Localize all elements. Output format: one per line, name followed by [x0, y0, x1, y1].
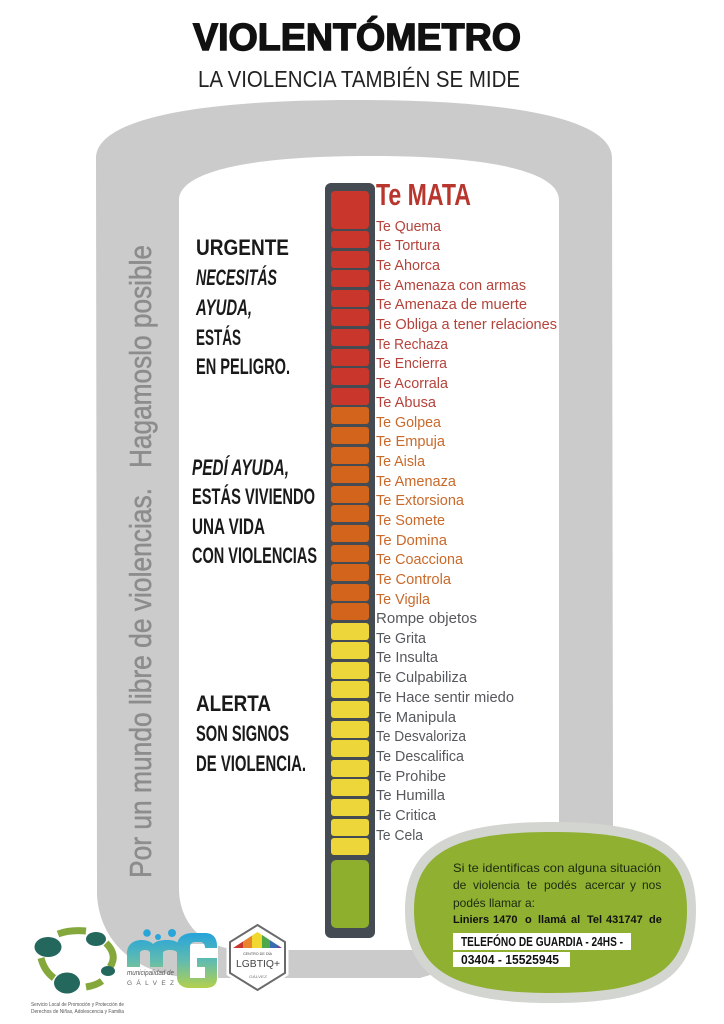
ask for help message: PEDÍ AYUDA, [192, 455, 289, 480]
callout text: nos [642, 878, 661, 892]
orange labels: Te Domina [376, 532, 448, 549]
grey labels: Te Humilla [376, 787, 446, 804]
callout text: podés [544, 878, 577, 892]
callout text: 431747 [606, 914, 643, 926]
subtitle: LA VIOLENCIA TAMBIÉN SE MIDE [198, 66, 520, 92]
orange segments [331, 407, 369, 620]
logo: municipalidad de galvez: municipalidad de [127, 970, 174, 977]
red labels: Te Ahorca [376, 257, 441, 274]
grey labels: Te Hace sentir miedo [376, 689, 514, 706]
side slogan: Por un mundo libre de violencias. [123, 488, 158, 878]
guard phone box: TELEFÓNO DE GUARDIA - 24HS - [461, 934, 623, 949]
side slogan: Hagamoslo posible [123, 245, 158, 468]
logo: LGBTIQ+ [230, 925, 285, 990]
callout text [453, 861, 662, 926]
grey labels: Te Grita [376, 630, 427, 647]
title: VIOLENTÓMETRO [193, 15, 521, 59]
logo: municipalidad de galvez [127, 929, 218, 988]
red labels: Te Obliga a tener relaciones [376, 316, 557, 333]
urgent message: URGENTE [196, 235, 289, 260]
orange labels [376, 414, 465, 608]
logo: LGBTIQ+: GÁLVEZ [249, 974, 268, 979]
urgent message: ESTÁS [196, 325, 241, 350]
callout text: al [571, 914, 580, 926]
red labels: Te Encierra [376, 355, 448, 372]
callout text: llamá [538, 914, 567, 926]
ask for help message [192, 455, 317, 568]
contact callout [405, 822, 696, 1003]
yellow segments [331, 623, 369, 855]
orange labels: Te Extorsiona [376, 492, 465, 509]
logo: LGBTIQ+: LGBTIQ+ [236, 959, 280, 970]
logo caption: Servicio Local de Promoción y Protección de [31, 1002, 124, 1008]
orange labels: Te Golpea [376, 414, 442, 431]
logo: municipalidad de galvez: GÁLVEZ [127, 978, 174, 987]
red labels: Te Quema [376, 218, 442, 235]
callout text: te [527, 878, 537, 892]
urgent message: AYUDA, [195, 295, 252, 320]
orange labels: Te Empuja [376, 433, 446, 450]
grey labels: Te Cela [376, 827, 424, 844]
thermometer gauge [325, 183, 375, 938]
callout text: y [630, 878, 636, 892]
grey frame [96, 100, 613, 978]
callout text: o [525, 914, 532, 926]
orange labels: Te Aisla [376, 453, 426, 470]
grey labels: Rompe objetos [376, 610, 477, 627]
callout text: Tel [587, 914, 602, 926]
grey labels: Te Culpabiliza [376, 669, 468, 686]
grey labels: Te Critica [376, 807, 437, 824]
guard phone box [453, 933, 631, 967]
callout text: de [453, 878, 467, 892]
callout text: acercar [585, 878, 625, 892]
callout text: 1470 [493, 914, 517, 926]
red labels [376, 218, 557, 411]
callout text: violencia [473, 878, 520, 892]
urgent message [195, 235, 290, 379]
guard phone box: 03404 - 15525945 [461, 952, 559, 967]
grey labels [376, 610, 514, 844]
grey labels: Te Descalifica [376, 748, 465, 765]
alert message: SON SIGNOS [196, 721, 289, 746]
callout text: Si te identificas con alguna situación [453, 861, 661, 875]
ask for help message: CON VIOLENCIAS [192, 543, 317, 568]
red labels: Te Tortura [376, 237, 441, 254]
callout text: de [649, 914, 662, 926]
green segment [331, 860, 369, 928]
logo: LGBTIQ+: CENTRO DE DÍA [243, 952, 273, 956]
grey labels: Te Prohibe [376, 768, 446, 785]
orange labels: Te Vigila [376, 591, 431, 608]
urgent message: EN PELIGRO. [196, 354, 290, 379]
orange labels: Te Somete [376, 512, 445, 529]
orange labels: Te Controla [376, 571, 452, 588]
callout text: Liniers [453, 914, 489, 926]
alert message: DE VIOLENCIA. [196, 751, 306, 776]
orange labels: Te Amenaza [376, 473, 457, 490]
urgent message: NECESITÁS [196, 265, 277, 290]
logo: servicio local: Derechos de Niñas, Adolescencia y Familia [31, 1009, 124, 1015]
alert message: ALERTA [196, 691, 271, 716]
Te MATA heading: Te MATA [376, 177, 471, 212]
ask for help message: ESTÁS VIVIENDO [192, 484, 315, 509]
alert message [196, 691, 306, 776]
grey labels: Te Desvaloriza [376, 728, 467, 745]
ask for help message: UNA VIDA [192, 514, 265, 539]
red segments [331, 191, 369, 405]
red labels: Te Acorrala [376, 375, 449, 392]
callout text: podés llamar a: [453, 896, 535, 910]
red labels: Te Amenaza con armas [376, 277, 526, 294]
red labels: Te Abusa [376, 394, 437, 411]
grey labels: Te Manipula [376, 709, 457, 726]
grey labels: Te Insulta [376, 649, 439, 666]
orange labels: Te Coacciona [376, 551, 464, 568]
red labels: Te Rechaza [376, 336, 449, 353]
logo: servicio local [31, 931, 124, 1015]
red labels: Te Amenaza de muerte [376, 296, 527, 313]
